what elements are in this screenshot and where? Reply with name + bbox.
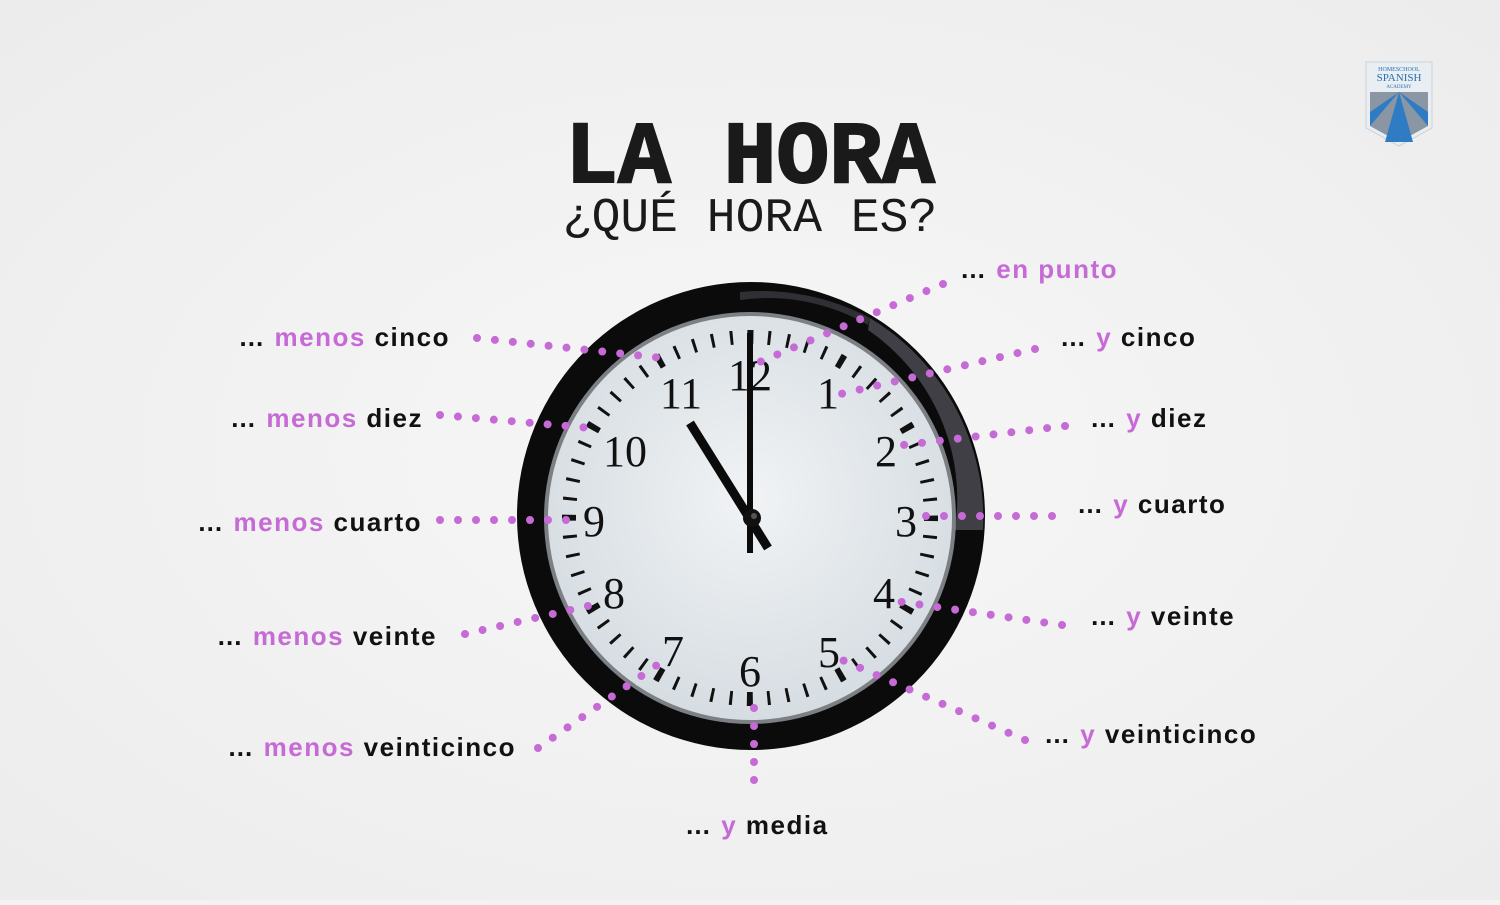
labels: … y media xyxy=(685,810,829,840)
clock: 9 xyxy=(583,497,605,546)
labels: … y veinticinco xyxy=(1044,719,1257,749)
dotted connectors xyxy=(440,284,1065,780)
subtitle: ¿QUÉ HORA ES? xyxy=(563,191,937,246)
clock: 4 xyxy=(873,569,895,618)
labels: … y diez xyxy=(1090,403,1208,433)
clock: 8 xyxy=(603,569,625,618)
logo xyxy=(1366,62,1432,146)
clock: 2 xyxy=(875,427,897,476)
labels: … menos cinco xyxy=(238,322,450,352)
clock: 12 xyxy=(728,351,772,400)
labels: … y veinte xyxy=(1090,601,1235,631)
clock: 11 xyxy=(660,369,702,418)
clock: 7 xyxy=(662,627,684,676)
clock: 3 xyxy=(895,497,917,546)
logo: SPANISH xyxy=(1377,72,1421,84)
labels: … y cuarto xyxy=(1077,489,1226,519)
labels: … menos veinticinco xyxy=(227,732,516,762)
labels xyxy=(197,254,1257,840)
clock: 1 xyxy=(817,369,839,418)
labels: … y cinco xyxy=(1060,322,1196,352)
title: LA HORA xyxy=(565,110,935,209)
clock: 10 xyxy=(603,427,647,476)
clock xyxy=(517,282,985,750)
clock: 5 xyxy=(818,628,840,677)
labels: … menos diez xyxy=(230,403,423,433)
logo: HOMESCHOOL xyxy=(1378,67,1420,73)
logo: ACADEMY xyxy=(1386,85,1412,90)
clock: 6 xyxy=(739,647,761,696)
labels: … en punto xyxy=(960,254,1118,284)
labels: … menos cuarto xyxy=(197,507,422,537)
labels: … menos veinte xyxy=(217,621,437,651)
